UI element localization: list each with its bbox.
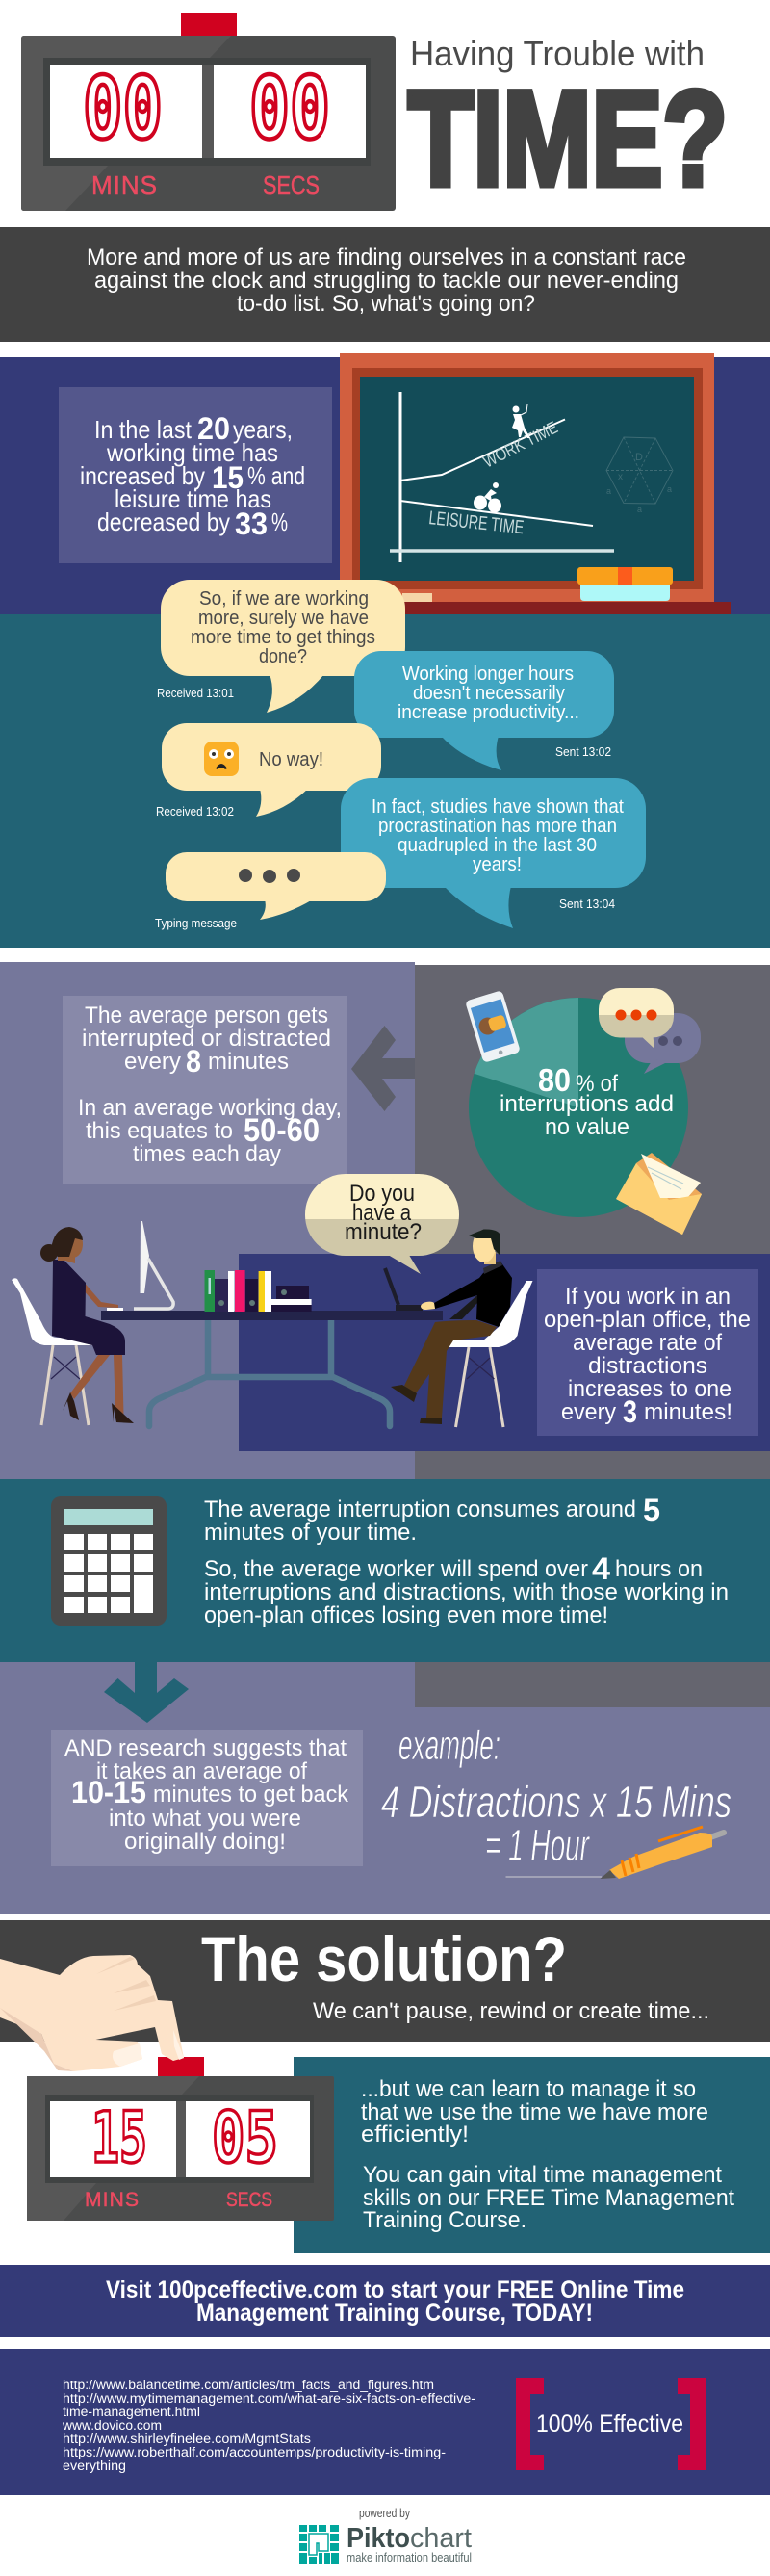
- speech bubble: do you have a minute: have a: [352, 1200, 412, 1226]
- panel: research recovery stat box: it takes an average of: [96, 1758, 307, 1784]
- speech bubble: typing: [166, 852, 386, 920]
- panel: sources and logo: [0, 2349, 770, 2495]
- panel: visit call to action: Management Training Course, TODAY!: [196, 2300, 593, 2327]
- icon: envelope with letter: [616, 1153, 702, 1235]
- panel: solution heading band: The solution?: [201, 1923, 567, 1994]
- panel: interruption cost band: The average interruption consumes around: [204, 1496, 636, 1522]
- panel: working time stat box: [59, 387, 332, 563]
- panel: working time stat box: In the last: [94, 415, 192, 444]
- icon: stopwatch header clock: 00: [249, 58, 330, 158]
- text: handwritten example: = 1 Hour: [485, 1820, 590, 1870]
- speech bubble: received message 1: [161, 580, 405, 713]
- text: reference links: everything: [63, 2459, 126, 2473]
- icon: cyclist: [474, 482, 501, 512]
- text: reference links: http://www.shirleyfinelee.com/MgmtStats: [63, 2432, 311, 2446]
- icon: stopwatch header clock: SECS: [263, 170, 320, 199]
- panel: intro band: to-do list. So, what's going on?: [237, 291, 535, 317]
- text: reference links: https://www.roberthalf.com/accountemps/productivity-is-timing-: [63, 2445, 446, 2459]
- panel: open-plan office stat box: every: [561, 1399, 616, 1425]
- illustration: woman at desk on chair: [12, 1227, 134, 1425]
- timestamp: typing message: Typing message: [155, 916, 237, 930]
- panel: working time stat box: %: [271, 507, 288, 536]
- speech bubble: do you have a minute: minute?: [345, 1219, 422, 1245]
- panel: interruption cost band: [0, 1479, 770, 1662]
- panel: research recovery stat box: 10-15: [71, 1775, 146, 1809]
- diagram: faint hexagon sketch: a: [606, 486, 611, 496]
- icon: yellow chat bubble: [599, 988, 674, 1049]
- text: reference links: http://www.balancetime.com/articles/tm_facts_and_figures.htm: [63, 2378, 434, 2392]
- panel: working time stat box: leisure time has: [115, 484, 271, 513]
- logo: 100% effective brackets: 100% Effective: [536, 2410, 683, 2437]
- illustration: hand pressing button: [0, 1955, 184, 2071]
- speech bubble: received message 1: more time to get things: [191, 627, 375, 648]
- diagram: faint hexagon sketch: a: [637, 505, 642, 514]
- panel: research recovery stat box: minutes to get back: [153, 1782, 349, 1808]
- text: handwritten example: example:: [398, 1722, 500, 1769]
- arrow: pointing down: [104, 1662, 189, 1723]
- speech bubble: sent message 2: [341, 778, 646, 928]
- icon: stopwatch header clock: [21, 13, 396, 211]
- diagram: faint hexagon sketch: a: [667, 484, 672, 494]
- icon: stopwatch showing 15:05: 15: [91, 2097, 147, 2179]
- panel: working time stat box: 15: [212, 460, 244, 495]
- speech bubble: received message 1: done?: [259, 646, 307, 667]
- panel: open-plan office stat box: If you work in an: [565, 1284, 731, 1310]
- speech bubble: sent message 2: In fact, studies have shown that: [372, 796, 624, 818]
- speech bubble: sent message 2: quadrupled in the last 30: [398, 835, 597, 856]
- illustration: chalkboard with work and leisure time chart: [340, 353, 732, 614]
- speech bubble: sent message 2: years!: [473, 854, 522, 875]
- illustration: chalkboard with work and leisure time chart: WORK TIME: [480, 418, 561, 472]
- diagram: faint hexagon sketch: D: [635, 452, 643, 463]
- panel: teal advice block: ...but we can learn to manage it so: [361, 2076, 696, 2102]
- icon: stopwatch showing 15:05: 05: [212, 2097, 278, 2179]
- panel: intro band: [0, 227, 770, 342]
- logo: powered by Piktochart: Pikto: [346, 2523, 410, 2554]
- panel: interruption cost band: 5: [643, 1493, 660, 1527]
- panel: navy section background: [0, 357, 770, 614]
- panel: intro band: against the clock and struggling to tackle our never-ending: [94, 268, 679, 294]
- pie chart: 80% of interruptions add no value: % of: [576, 1071, 618, 1097]
- panel: working time stat box: increased by: [80, 461, 205, 490]
- icon: calculator: [51, 1496, 167, 1626]
- title: having trouble with time: Having Trouble with: [410, 34, 705, 73]
- panel: interruption cost band: hours on: [615, 1556, 703, 1582]
- speech bubble: sent message 1: [354, 651, 614, 770]
- panel: interruption cost band: interruptions and distractions, with those working in: [204, 1579, 729, 1605]
- icon: stopwatch showing 15:05: SECS: [226, 2189, 272, 2211]
- panel: interruption stat box: In an average working day,: [78, 1095, 342, 1121]
- text: reference links: www.dovico.com: [62, 2418, 162, 2433]
- speech bubble: do you have a minute: [305, 1174, 459, 1274]
- icon: stopwatch header clock: MINS: [91, 170, 157, 199]
- panel: interruption cost band: So, the average worker will spend over: [204, 1556, 588, 1582]
- logo: powered by Piktochart: chart: [410, 2523, 472, 2554]
- panel: recovery section background: [0, 1662, 770, 1914]
- timestamp: sent 13:02: Sent 13:02: [555, 744, 611, 759]
- speech bubble: no way: No way!: [259, 749, 323, 770]
- speech bubble: sent message 1: doesn't necessarily: [413, 683, 565, 704]
- panel: interruption cost band: minutes of your time.: [204, 1520, 417, 1546]
- panel: open-plan office stat box: minutes!: [644, 1399, 732, 1425]
- text: reference links: time-management.html: [63, 2405, 200, 2419]
- text: handwritten example: [381, 1722, 732, 1870]
- panel: interruption cost band: 4: [592, 1551, 610, 1586]
- panel: interruption stat box: minutes: [208, 1049, 289, 1075]
- icon: purple chat bubble: [625, 1013, 701, 1074]
- panel: interruption stat box: 8: [186, 1044, 201, 1079]
- text: reference links: [62, 2378, 475, 2473]
- panel: research recovery stat box: [51, 1730, 363, 1866]
- timestamp: sent 13:04: Sent 13:04: [559, 897, 615, 911]
- panel: working time stat box: % and: [247, 461, 305, 490]
- panel: interruption stat box: every: [124, 1049, 181, 1075]
- speech bubble: do you have a minute: Do you: [349, 1181, 415, 1207]
- illustration: chalkboard with work and leisure time chart: LEISURE TIME: [427, 507, 525, 538]
- panel: intro band: More and more of us are finding ourselves in a constant race: [87, 245, 686, 271]
- panel: interruption stat box: this equates to: [86, 1118, 233, 1144]
- arrow: pointing left: [351, 1026, 415, 1111]
- panel: teal chat section background: [0, 614, 770, 948]
- icon: stopwatch showing 15:05: MINS: [85, 2189, 139, 2211]
- pie chart: 80% of interruptions add no value: [469, 998, 688, 1217]
- pie chart: 80% of interruptions add no value: 80: [538, 1062, 571, 1098]
- logo: powered by Piktochart: make information beautiful: [346, 2551, 472, 2564]
- panel: visit call to action: [0, 2265, 770, 2337]
- speech bubble: sent message 2: procrastination has more than: [378, 816, 617, 837]
- icon: smartphone: [465, 990, 521, 1063]
- diagram: faint hexagon sketch: [606, 437, 673, 514]
- panel: interruption cost band: open-plan offices losing even more time!: [204, 1602, 608, 1628]
- panel: interruption stat box: The average person gets: [85, 1002, 328, 1028]
- panel: interruption stat box: 50-60: [244, 1112, 320, 1149]
- panel: office section background: [0, 962, 770, 1479]
- panel: working time stat box: 33: [235, 507, 268, 541]
- speech bubble: sent message 1: increase productivity...: [398, 702, 579, 723]
- panel: interruption stat box: interrupted or distracted: [82, 1026, 331, 1052]
- panel: solution heading band: [0, 1920, 770, 2042]
- panel: teal advice block: Training Course.: [363, 2207, 526, 2233]
- speech bubble: sent message 1: Working longer hours: [402, 664, 574, 685]
- panel: teal advice block: [294, 2057, 770, 2253]
- panel: teal advice block: efficiently!: [361, 2121, 469, 2147]
- panel: working time stat box: 20: [197, 411, 230, 446]
- icon: shocked emoji: [204, 742, 239, 776]
- panel: teal advice block: You can gain vital time management: [363, 2162, 722, 2188]
- panel: open-plan office stat box: 3: [623, 1394, 637, 1429]
- icon: pen writing: [506, 1827, 724, 1879]
- panel: working time stat box: decreased by: [97, 507, 230, 536]
- panel: open-plan office stat box: increases to one: [568, 1376, 732, 1402]
- panel: navy office block: [239, 1254, 770, 1451]
- panel: open-plan office stat box: distractions: [588, 1353, 707, 1379]
- panel: interruption stat box: [63, 996, 347, 1184]
- panel: teal advice block: that we use the time we have more: [361, 2099, 708, 2125]
- illustration: office desk with books and monitor: [101, 1221, 443, 1426]
- icon: stopwatch showing 15:05: [27, 2057, 334, 2221]
- speech bubble: received message 1: more, surely we have: [198, 608, 369, 629]
- panel: research recovery stat box: originally doing!: [124, 1829, 286, 1855]
- text: reference links: http://www.mytimemanagement.com/what-are-six-facts-on-effective-: [63, 2391, 475, 2406]
- diagram: faint hexagon sketch: x: [618, 472, 623, 482]
- speech bubble: received message 1: So, if we are working: [199, 588, 369, 610]
- logo: 100% effective brackets: [516, 2378, 706, 2470]
- icon: books: [204, 1270, 312, 1312]
- panel: open-plan office stat box: average rate of: [573, 1330, 722, 1356]
- icon: stopwatch header clock: 00: [83, 58, 163, 158]
- timestamp: received 13:02: Received 13:02: [156, 804, 234, 819]
- panel: interruption stat box: times each day: [133, 1141, 281, 1167]
- panel: open-plan office stat box: [537, 1269, 758, 1436]
- logo: powered by Piktochart: powered by: [359, 2507, 411, 2520]
- illustration: man with laptop on chair: [385, 1229, 533, 1427]
- pie chart: 80% of interruptions add no value: no value: [545, 1114, 629, 1140]
- panel: visit call to action: Visit 100pceffective.com to start your FREE Online Time: [106, 2277, 684, 2303]
- icon: piktochart mark: [299, 2525, 339, 2564]
- panel: solution heading band: We can't pause, rewind or create time...: [313, 1998, 709, 2024]
- timestamp: received 13:01: Received 13:01: [157, 686, 234, 700]
- panel: working time stat box: years,: [233, 415, 293, 444]
- panel: research recovery stat box: AND research suggests that: [64, 1735, 346, 1761]
- panel: working time stat box: working time has: [106, 438, 278, 467]
- icon: monitor: [107, 1221, 173, 1311]
- pie chart: 80% of interruptions add no value: interruptions add: [500, 1091, 674, 1117]
- panel: teal advice block: skills on our FREE Time Management: [363, 2185, 734, 2211]
- speech bubble: no way: [162, 723, 381, 817]
- panel: research recovery stat box: into what you were: [109, 1806, 301, 1832]
- icon: woman figure: [512, 404, 530, 438]
- logo: powered by Piktochart: [299, 2507, 472, 2564]
- panel: open-plan office stat box: open-plan office, the: [544, 1307, 751, 1333]
